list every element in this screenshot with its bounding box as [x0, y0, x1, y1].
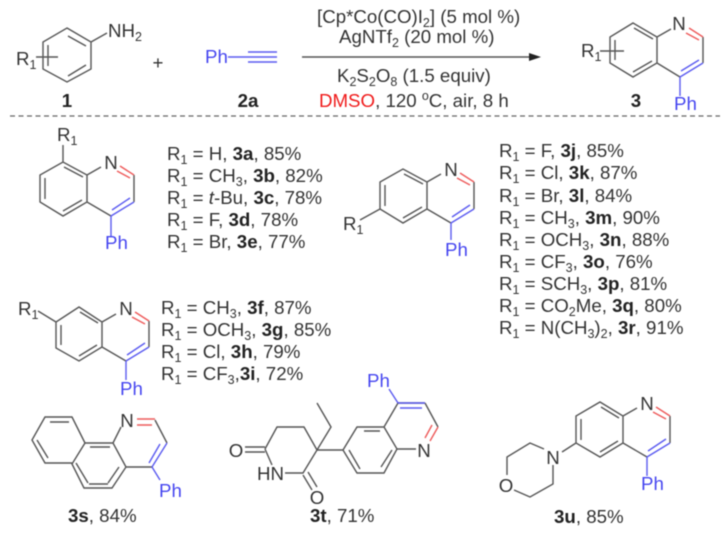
substituent list: 3f to 3i: = Cl,: [181, 341, 231, 362]
structure: 8-substituted quinoline: N: [104, 152, 118, 173]
substituent list: 3j to 3r: R: [499, 295, 512, 316]
substituent list: 3j to 3r: 1: [512, 327, 520, 341]
product 3: general quinoline: N: [672, 13, 686, 34]
reactant 2a: phenylacetylene: [205, 46, 277, 111]
reactant 1: substituted aniline: 2: [135, 30, 142, 44]
substituent list: 3f to 3i: 3f, 87%: [247, 297, 312, 318]
substituent list: 3j to 3r: 3m, 90%: [585, 207, 660, 228]
substituent list: 3a to 3e: 1: [180, 175, 188, 189]
substituent list: 3j to 3r: = SCH: [519, 273, 580, 294]
structure: 3t glutethimide quinoline: HN: [257, 463, 284, 484]
structure: 3u morpholine quinoline: N: [640, 393, 654, 414]
substituent list: 3f to 3i: R: [161, 341, 174, 362]
substituent list: 3j to 3r: 2: [569, 305, 576, 319]
substituent list: 3a to 3e: = H,: [187, 143, 233, 164]
substituent list: 3j to 3r: = N(CH: [519, 317, 587, 338]
substituent list: 3j to 3r: 3l, 84%: [569, 185, 632, 206]
reaction arrow with conditions: 8: [390, 75, 397, 89]
reaction arrow with conditions: [Cp*Co(CO)I: [317, 6, 423, 27]
product 3: general quinoline: R: [581, 40, 594, 61]
structure: 3t glutethimide quinoline: [229, 370, 438, 526]
substituent list: 3j to 3r: ): [594, 317, 601, 338]
reactant 1: substituted aniline: NH: [108, 20, 135, 41]
structure: 8-substituted quinoline: [40, 124, 134, 253]
substituent list: 3j to 3r: R: [499, 229, 512, 250]
structure: 6-substituted quinoline: N: [444, 159, 458, 180]
substituent list: 3f to 3i: [161, 297, 331, 387]
substituent list: 3j to 3r: R: [499, 162, 512, 183]
reactant 1: substituted aniline: 1: [30, 58, 36, 72]
substituent list: 3f to 3i: 1: [174, 351, 182, 365]
structure: 7-substituted quinoline: N: [119, 298, 133, 319]
substituent list: 3a to 3e: ,: [243, 165, 253, 186]
substituent list: 3j to 3r: 3: [580, 283, 587, 297]
reaction arrow with conditions: O: [376, 65, 390, 86]
substituent list: 3f to 3i: 3: [244, 329, 251, 343]
substituent list: 3a to 3e: 1: [180, 241, 188, 255]
substituent list: 3f to 3i: = CH: [181, 297, 230, 318]
substituent list: 3a to 3e: 3: [236, 175, 243, 189]
structure: 3u morpholine quinoline: N: [546, 447, 560, 468]
structure: 8-substituted quinoline: 1: [70, 134, 78, 148]
substituent list: 3j to 3r: R: [499, 317, 512, 338]
structure: 3u morpholine quinoline: 3u, 85%: [554, 506, 624, 527]
substituent list: 3j to 3r: 3: [566, 261, 573, 275]
substituent list: 3j to 3r: = CH: [519, 207, 568, 228]
substituent list: 3j to 3r: 3: [568, 217, 575, 231]
substituent list: 3a to 3e: 1: [180, 197, 188, 211]
substituent list: 3a to 3e: R: [167, 187, 180, 208]
substituent list: 3j to 3r: = OCH: [519, 229, 582, 250]
substituent list: 3j to 3r: ,: [608, 317, 618, 338]
plus sign: +: [153, 52, 163, 73]
substituent list: 3f to 3i: R: [161, 319, 174, 340]
substituent list: 3j to 3r: 1: [512, 239, 520, 253]
structure: 3s benzoquinoline: [32, 410, 182, 526]
substituent list: 3f to 3i: 3i, 72%: [240, 363, 303, 384]
structure: 7-substituted quinoline: 1: [32, 308, 38, 322]
substituent list: 3a to 3e: t-Bu, 3c, 78%: [209, 187, 322, 208]
substituent list: 3a to 3e: =: [187, 187, 209, 208]
substituent list: 3f to 3i: 1: [174, 307, 182, 321]
structure: 3t glutethimide quinoline: N: [417, 440, 431, 461]
substituent list: 3j to 3r: 1: [512, 150, 520, 164]
substituent list: 3j to 3r: 3p, 81%: [598, 273, 667, 294]
substituent list: 3j to 3r: 3n, 88%: [600, 229, 669, 250]
substituent list: 3j to 3r: 3j, 85%: [560, 140, 624, 161]
reactant 1: substituted aniline: 1: [62, 90, 72, 111]
substituent list: 3j to 3r: 3k, 87%: [569, 162, 637, 183]
substituent list: 3a to 3e: R: [167, 165, 180, 186]
substituent list: 3j to 3r: ,: [575, 207, 585, 228]
substituent list: 3f to 3i: 3h, 79%: [231, 341, 300, 362]
reaction arrow with conditions: AgNTf: [339, 26, 392, 47]
substituent list: 3a to 3e: = F,: [187, 209, 228, 230]
structure: 3u morpholine quinoline: Ph: [641, 473, 664, 494]
reaction arrow with conditions: S: [356, 65, 369, 86]
structure: 7-substituted quinoline: R: [18, 298, 32, 319]
structure: 7-substituted quinoline: Ph: [120, 378, 143, 399]
substituent list: 3j to 3r: = Cl,: [519, 162, 569, 183]
substituent list: 3j to 3r: ,: [573, 251, 583, 272]
substituent list: 3j to 3r: R: [499, 185, 512, 206]
substituent list: 3f to 3i: 1: [174, 373, 182, 387]
substituent list: 3j to 3r: Me,: [576, 295, 612, 316]
substituent list: 3j to 3r: R: [499, 273, 512, 294]
reaction arrow with conditions: (1.5 equiv): [397, 65, 491, 86]
structure: 3t glutethimide quinoline: 3t, 71%: [310, 505, 374, 526]
substituent list: 3f to 3i: R: [161, 363, 174, 384]
reaction arrow with conditions: 2: [392, 36, 399, 50]
substituent list: 3j to 3r: 1: [512, 195, 520, 209]
product 3: general quinoline: [581, 13, 703, 114]
substituent list: 3j to 3r: 1: [512, 261, 520, 275]
substituent list: 3j to 3r: 1: [512, 172, 520, 186]
substituent list: 3a to 3e: 3e, 77%: [237, 231, 305, 252]
structure: 3s benzoquinoline: 3s, 84%: [68, 505, 137, 526]
substituent list: 3j to 3r: = CO: [519, 295, 569, 316]
structure: 6-substituted quinoline: [343, 159, 474, 260]
substituent list: 3j to 3r: 3q, 80%: [612, 295, 682, 316]
substituent list: 3j to 3r: R: [499, 140, 512, 161]
substituent list: 3j to 3r: = CF: [519, 251, 566, 272]
reactant 2a: phenylacetylene: 2a: [238, 90, 259, 111]
substituent list: 3j to 3r: 1: [512, 305, 520, 319]
substituent list: 3j to 3r: = F,: [519, 140, 560, 161]
reaction arrow with conditions: (20 mol %): [399, 26, 494, 47]
substituent list: 3f to 3i: 3: [230, 307, 237, 321]
substituent list: 3a to 3e: 3d, 78%: [228, 209, 298, 230]
substituent list: 3a to 3e: R: [167, 143, 180, 164]
substituent list: 3f to 3i: = CF: [181, 363, 228, 384]
structure: 3u morpholine quinoline: [499, 393, 670, 527]
structure: 3s benzoquinoline: N: [120, 410, 134, 431]
structure: 7-substituted quinoline: [18, 298, 149, 399]
reaction arrow with conditions: [302, 6, 541, 111]
reactant 1: substituted aniline: [16, 20, 142, 111]
reaction arrow with conditions: C, air, 8 h: [429, 90, 509, 111]
substituent list: 3f to 3i: 3: [228, 373, 235, 387]
structure: 3s benzoquinoline: Ph: [159, 480, 182, 501]
substituent list: 3j to 3r: = Br,: [519, 185, 569, 206]
substituent list: 3a to 3e: 1: [180, 219, 188, 233]
substituent list: 3j to 3r: 3: [587, 327, 594, 341]
substituent list: 3f to 3i: 3g, 85%: [262, 319, 331, 340]
substituent list: 3a to 3e: [167, 143, 323, 255]
divider: dashed line: [10, 115, 720, 117]
substituent list: 3j to 3r: 1: [512, 283, 520, 297]
substituent list: 3f to 3i: R: [161, 297, 174, 318]
structure: 3t glutethimide quinoline: Ph: [367, 370, 390, 391]
substituent list: 3f to 3i: ,: [237, 297, 247, 318]
reaction arrow with conditions: 2: [349, 75, 356, 89]
reactant 2a: phenylacetylene: Ph: [205, 46, 228, 67]
substituent list: 3j to 3r: 3r, 91%: [618, 317, 683, 338]
structure: 8-substituted quinoline: Ph: [105, 232, 128, 253]
substituent list: 3j to 3r: ,: [589, 229, 600, 250]
product 3: general quinoline: 3: [631, 90, 641, 111]
substituent list: 3f to 3i: ,: [251, 319, 262, 340]
substituent list: 3j to 3r: 1: [512, 217, 520, 231]
structure: 6-substituted quinoline: 1: [356, 223, 364, 237]
substituent list: 3j to 3r: 3o, 76%: [583, 251, 653, 272]
reaction arrow with conditions: 2: [369, 75, 376, 89]
structure: 3t glutethimide quinoline: O: [229, 440, 243, 461]
structure: 3u morpholine quinoline: O: [499, 475, 513, 496]
product 3: general quinoline: Ph: [674, 93, 697, 114]
product 3: general quinoline: 1: [594, 50, 602, 64]
substituent list: 3j to 3r: ,: [587, 273, 598, 294]
structure: 6-substituted quinoline: R: [343, 213, 356, 234]
substituent list: 3j to 3r: 3: [582, 239, 589, 253]
structure: 6-substituted quinoline: Ph: [445, 239, 468, 260]
reaction arrow with conditions: ] (5 mol %): [430, 6, 520, 27]
substituent list: 3a to 3e: 3b, 82%: [253, 165, 323, 186]
substituent list: 3a to 3e: 3a, 85%: [233, 143, 301, 164]
substituent list: 3j to 3r: R: [499, 251, 512, 272]
substituent list: 3f to 3i: ,: [235, 363, 240, 384]
substituent list: 3f to 3i: 1: [174, 329, 182, 343]
substituent list: 3a to 3e: R: [167, 231, 180, 252]
reactant 1: substituted aniline: R: [16, 48, 30, 69]
reaction arrow with conditions: 2: [423, 16, 430, 30]
substituent list: 3a to 3e: = Br,: [187, 231, 237, 252]
reaction arrow with conditions: o: [422, 89, 429, 103]
structure: 8-substituted quinoline: R: [57, 124, 70, 145]
substituent list: 3j to 3r: R: [499, 207, 512, 228]
structure: 3t glutethimide quinoline: O: [310, 487, 324, 508]
substituent list: 3a to 3e: = CH: [187, 165, 236, 186]
reaction arrow with conditions: DMSO, 120: [319, 90, 417, 111]
substituent list: 3a to 3e: 1: [180, 153, 188, 167]
substituent list: 3a to 3e: R: [167, 209, 180, 230]
reaction arrow with conditions: K: [337, 65, 349, 86]
substituent list: 3f to 3i: = OCH: [181, 319, 244, 340]
substituent list: 3j to 3r: [499, 140, 683, 341]
substituent list: 3j to 3r: 2: [601, 327, 608, 341]
